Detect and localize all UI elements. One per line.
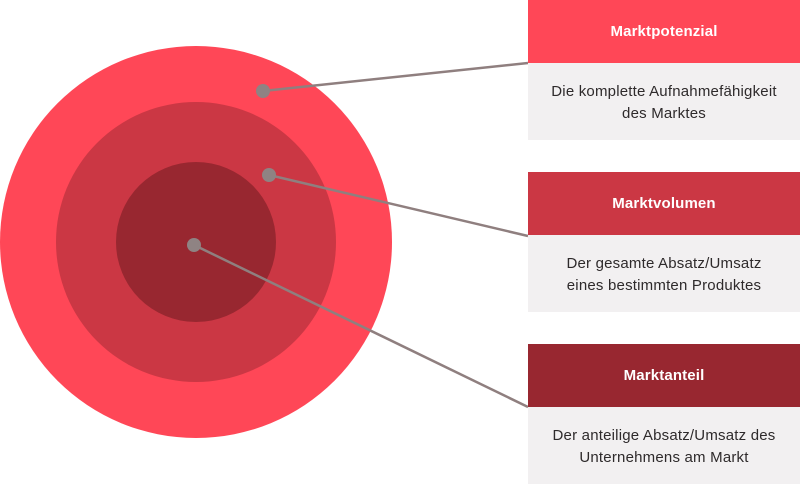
panel text: Marktanteil	[528, 407, 800, 484]
panel text: Marktpotenzial: Die komplette Aufnahmefähigkeit	[551, 83, 777, 100]
panel heading: Marktpotenzial	[528, 0, 800, 63]
circle: Marktanteil	[116, 162, 276, 322]
leader line: Marktvolumen	[262, 168, 528, 236]
leader line: Marktpotenzial	[256, 63, 528, 98]
panel text: Marktvolumen: eines bestimmten Produktes	[567, 277, 761, 294]
leader line: Marktanteil	[187, 238, 528, 407]
panel text: Marktanteil: Der anteilige Absatz/Umsatz des	[553, 427, 775, 444]
panel text: Marktvolumen	[528, 235, 800, 312]
circle: Marktvolumen	[56, 102, 336, 382]
panel text: Marktanteil: Unternehmens am Markt	[579, 449, 749, 466]
panel heading: Marktanteil: Marktanteil	[624, 367, 704, 384]
panel heading: Marktvolumen	[528, 172, 800, 235]
circle: Marktpotenzial	[0, 46, 392, 438]
panel heading: Marktanteil	[528, 344, 800, 407]
panel text: Marktpotenzial	[528, 63, 800, 140]
panel text: Marktvolumen: Der gesamte Absatz/Umsatz	[566, 255, 762, 272]
panel heading: Marktvolumen: Marktvolumen	[612, 195, 716, 212]
panel heading: Marktpotenzial: Marktpotenzial	[610, 23, 718, 40]
panel text: Marktpotenzial: des Marktes	[622, 105, 706, 122]
